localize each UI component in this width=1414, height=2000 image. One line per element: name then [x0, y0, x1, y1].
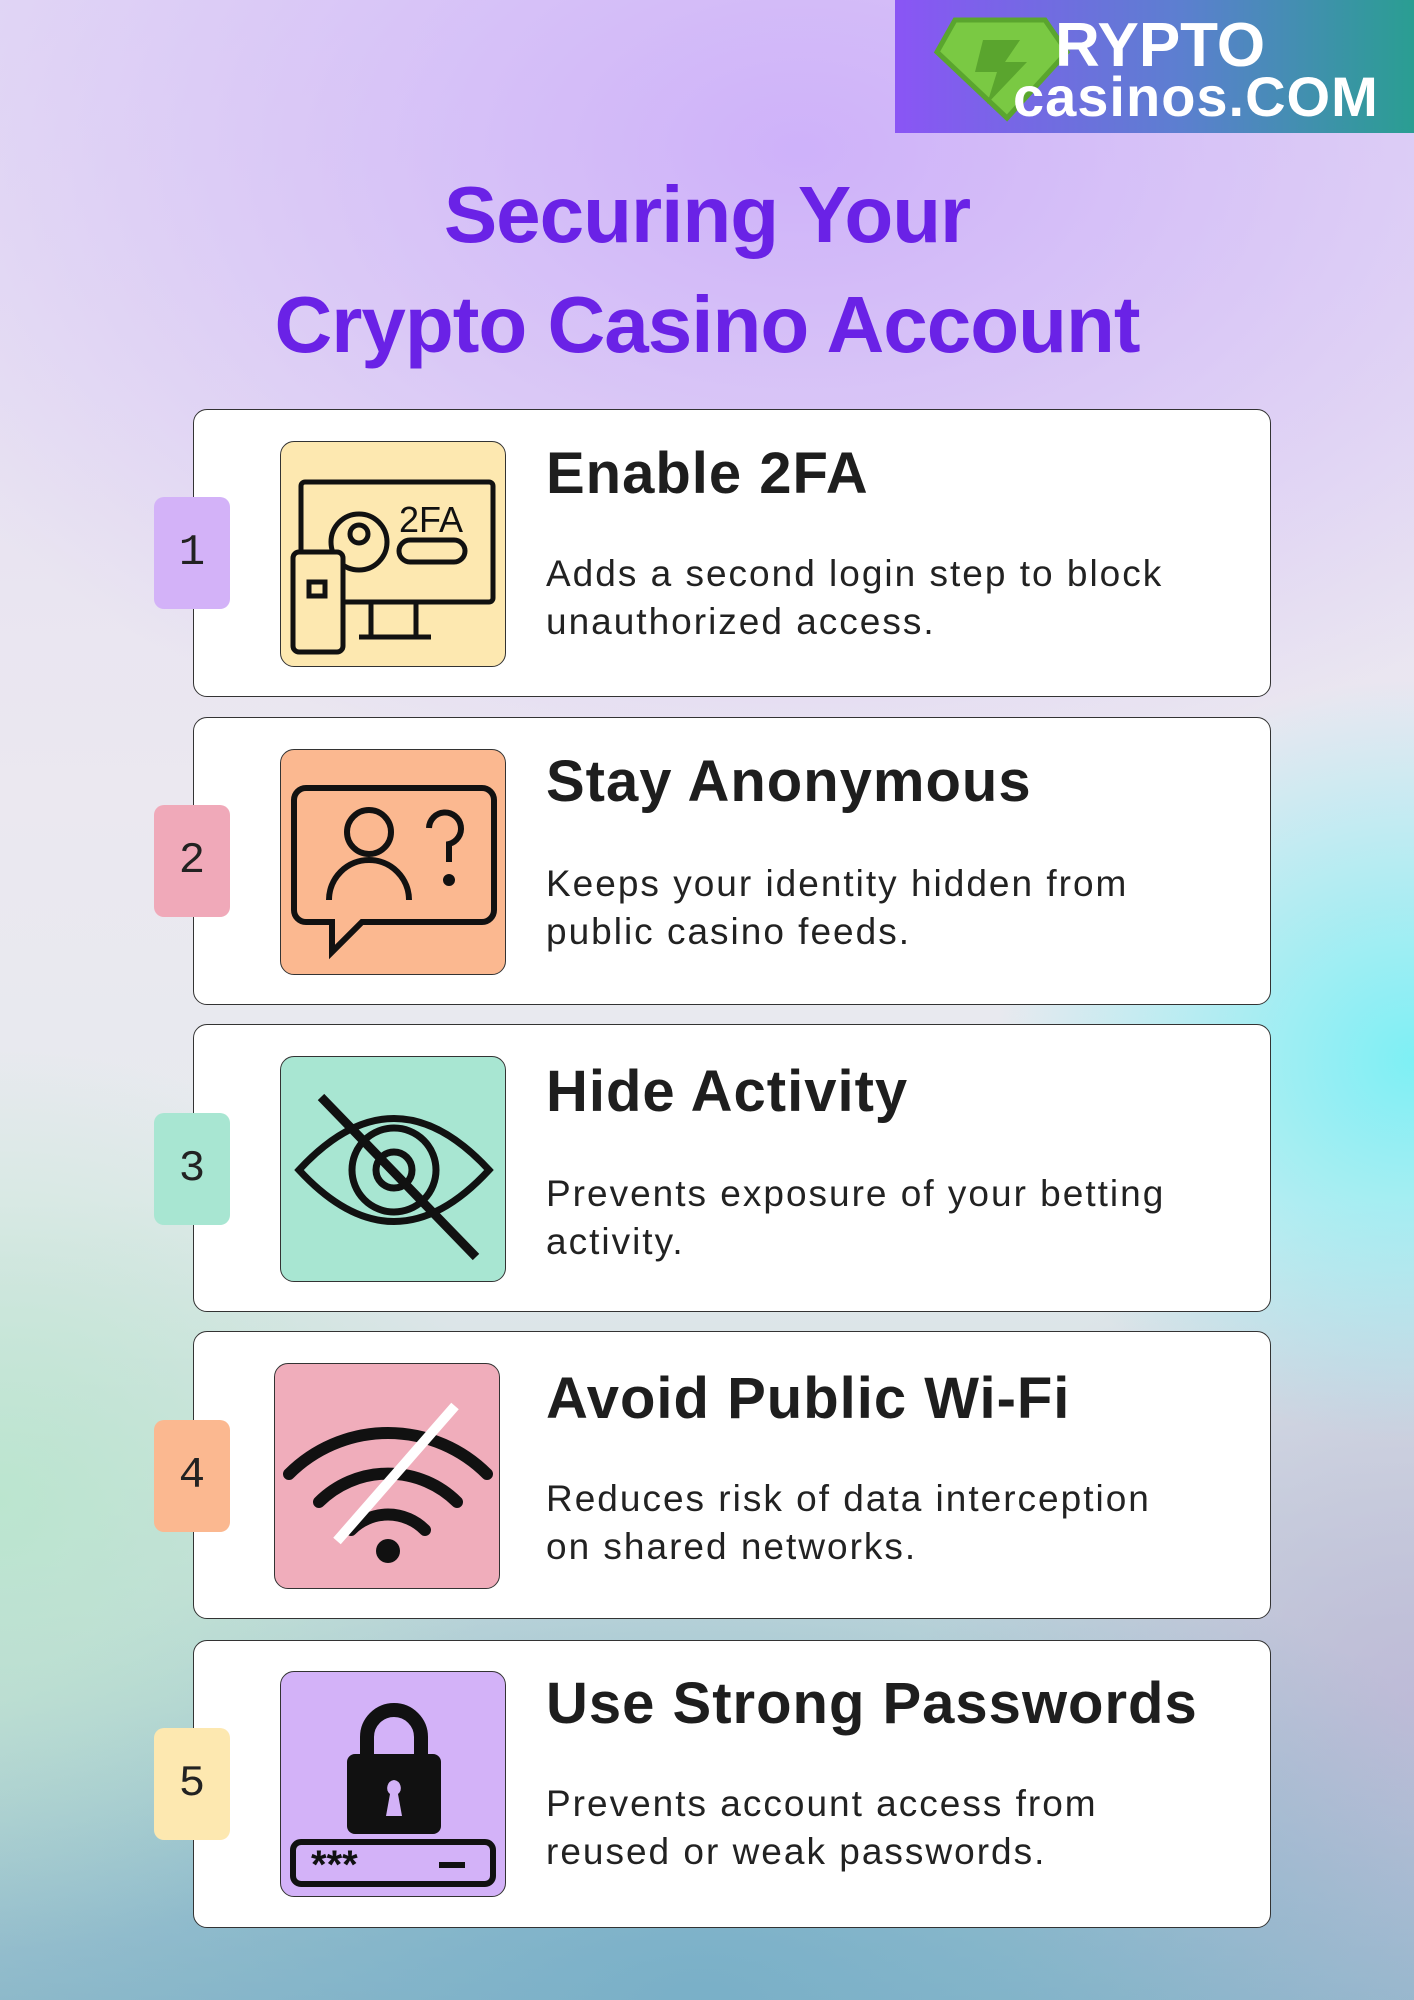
title: Securing Your: [444, 170, 970, 259]
icon: anonymous: [280, 749, 506, 975]
icon: 2FA: [280, 441, 506, 667]
desc 2: [546, 863, 1128, 952]
icon: no wifi: [274, 1363, 500, 1589]
desc 1: [546, 553, 1163, 642]
badge 4: 4: [179, 1451, 205, 1501]
heading 5: Use Strong Passwords: [546, 1671, 1198, 1736]
desc 5: [546, 1783, 1098, 1872]
logo: [895, 0, 1414, 133]
icon: 2FA: 2FA: [399, 499, 463, 540]
desc 5: Prevents account access from: [546, 1783, 1098, 1824]
heading 2: Stay Anonymous: [546, 749, 1032, 814]
desc 1: unauthorized access.: [546, 601, 936, 642]
desc 5: reused or weak passwords.: [546, 1831, 1046, 1872]
card 4: [193, 1331, 1271, 1619]
badge 1: [154, 497, 230, 609]
badge 5: 5: [179, 1759, 205, 1809]
desc 2: Keeps your identity hidden from: [546, 863, 1128, 904]
title: [274, 170, 1140, 369]
badge 2: 2: [179, 836, 205, 886]
desc 2: public casino feeds.: [546, 911, 911, 952]
card 3: [193, 1024, 1271, 1312]
desc 1: Adds a second login step to block: [546, 553, 1163, 594]
title: Crypto Casino Account: [274, 280, 1139, 369]
icon: hidden eye: [280, 1056, 506, 1282]
desc 4: Reduces risk of data interception: [546, 1478, 1151, 1519]
heading 4: Avoid Public Wi-Fi: [546, 1366, 1070, 1431]
badge 1: 1: [179, 528, 205, 578]
desc 4: on shared networks.: [546, 1526, 917, 1567]
heading 1: Enable 2FA: [546, 441, 869, 506]
badge 5: [154, 1728, 230, 1840]
logo: casinos.COM: [1013, 65, 1379, 128]
desc 3: [546, 1173, 1165, 1262]
card 5: [193, 1640, 1271, 1928]
logo: RYPTO: [1055, 11, 1265, 80]
desc 3: activity.: [546, 1221, 685, 1262]
desc 4: [546, 1478, 1151, 1567]
desc 3: Prevents exposure of your betting: [546, 1173, 1165, 1214]
icon: green diamond: [937, 20, 1067, 118]
icon: lock password: [280, 1671, 506, 1897]
heading 3: Hide Activity: [546, 1059, 908, 1124]
card 1: [193, 409, 1271, 697]
badge 4: [154, 1420, 230, 1532]
badge 3: [154, 1113, 230, 1225]
badge 2: [154, 805, 230, 917]
card 2: [193, 717, 1271, 1005]
badge 3: 3: [179, 1144, 205, 1194]
icon: lock password: ***: [311, 1843, 358, 1887]
